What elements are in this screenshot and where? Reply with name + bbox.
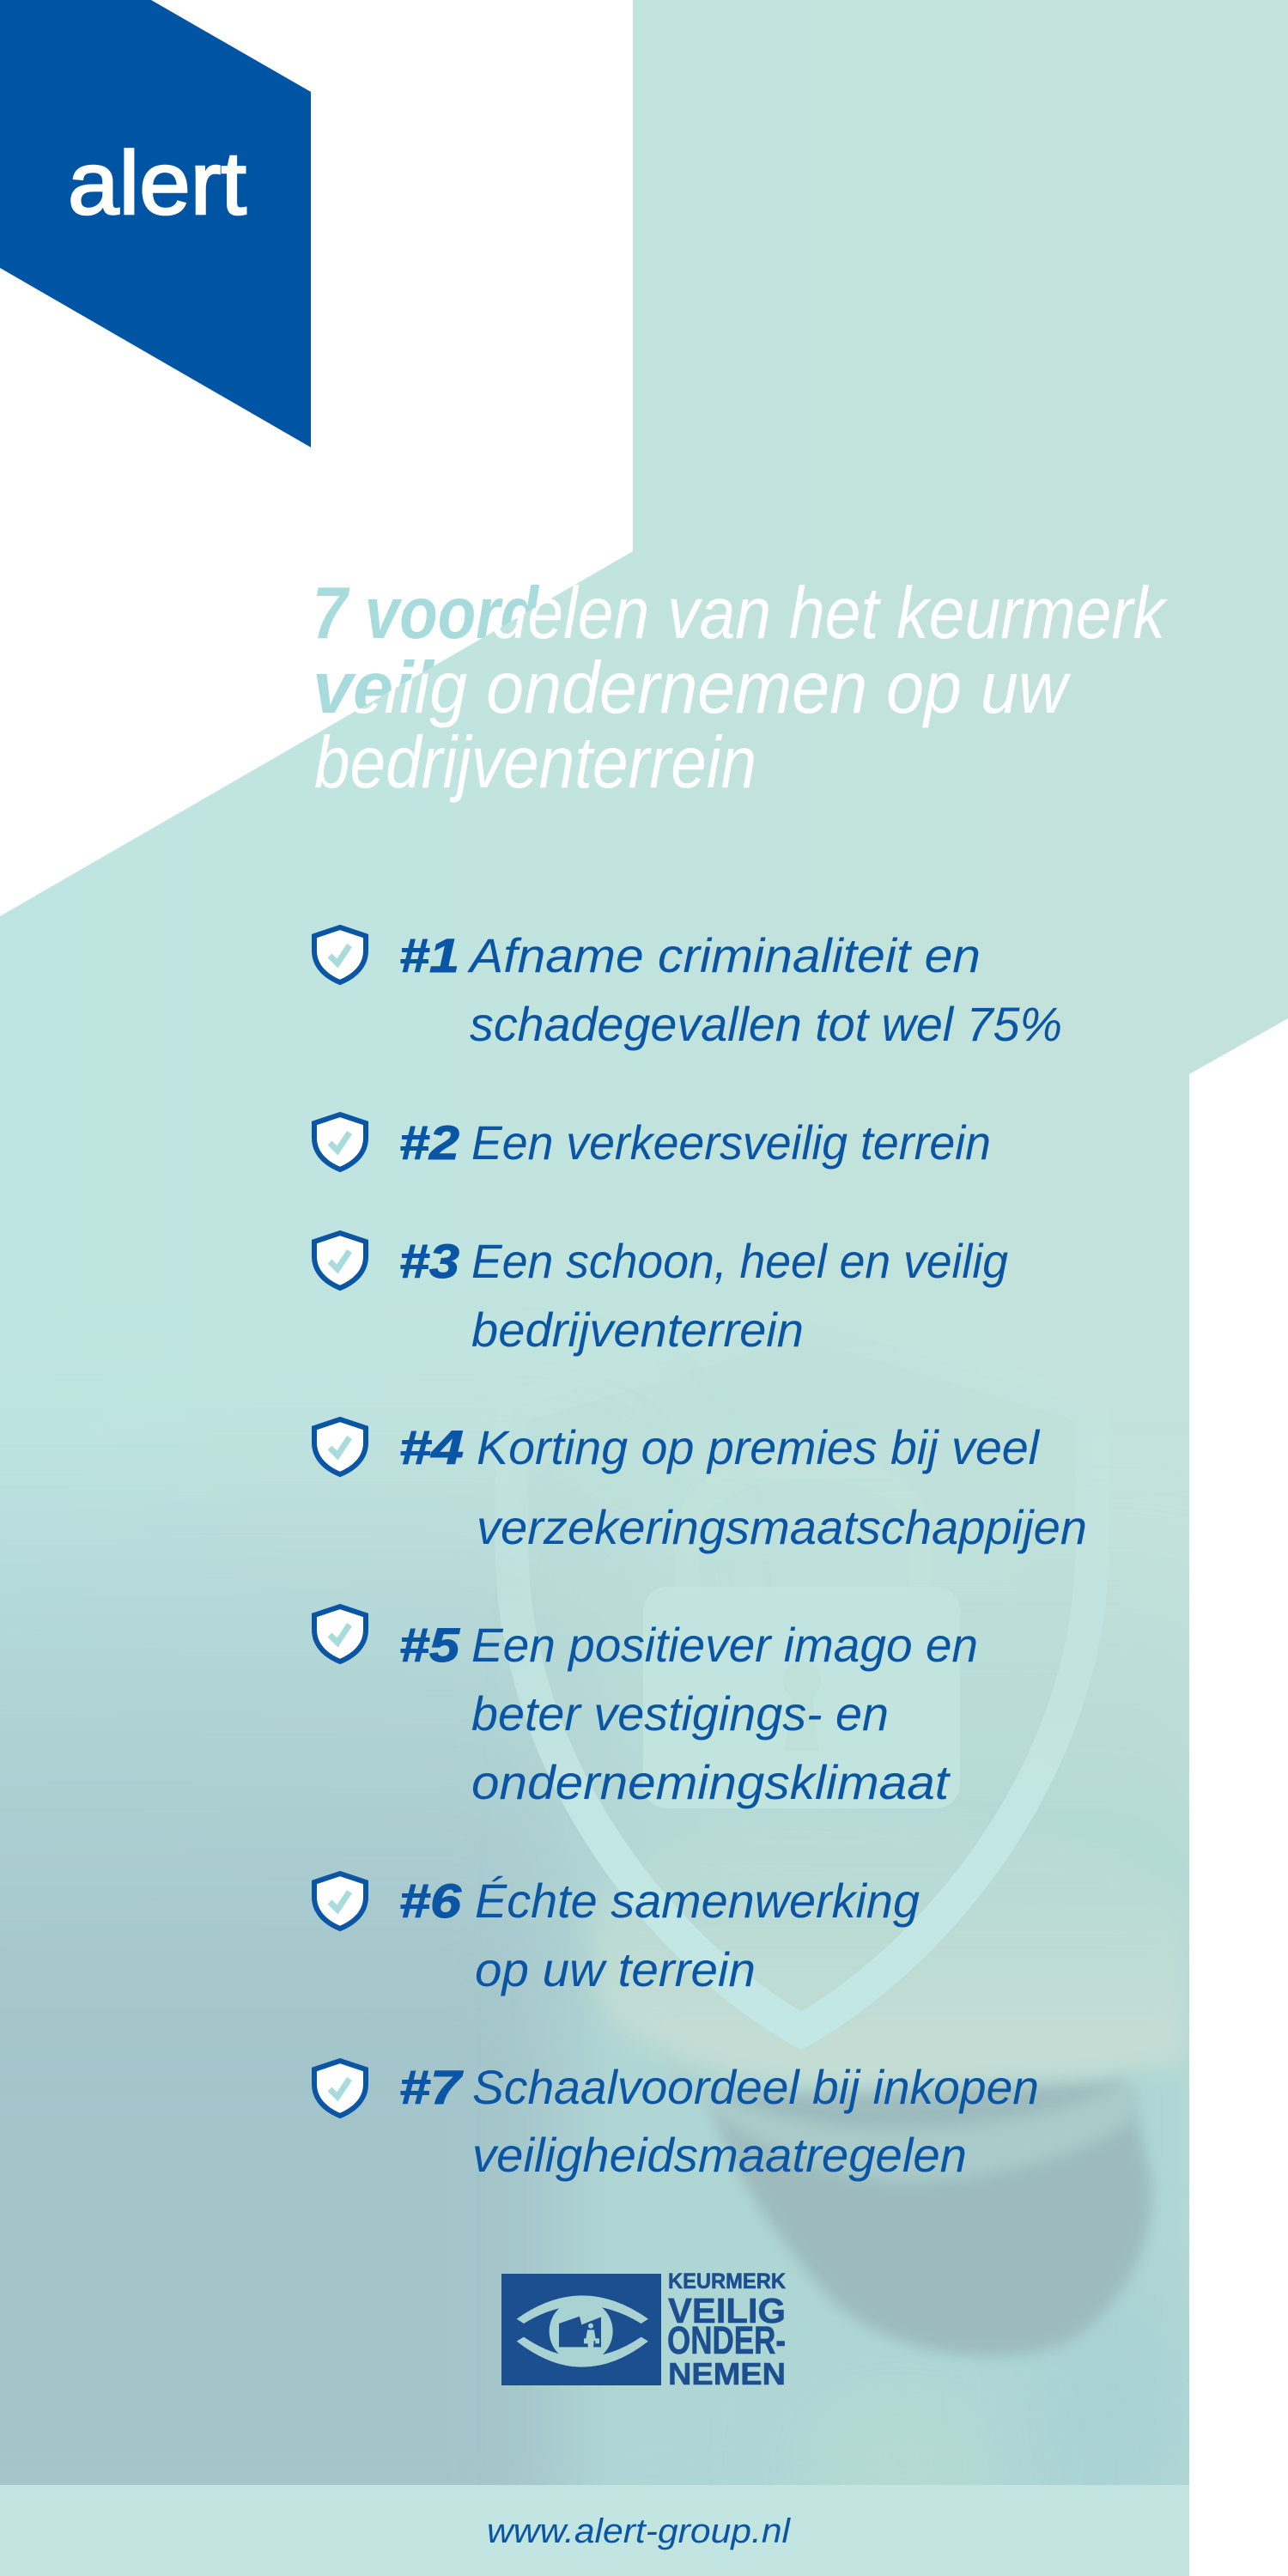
logo: keurmerk veilig ondernemen: ONDER-	[667, 2318, 786, 2362]
benefit 5	[314, 1607, 978, 1809]
title: veilig ondernemen op uw	[313, 647, 1071, 729]
logo: alert hexagon	[0, 0, 311, 447]
title: veil	[313, 647, 435, 729]
benefit 4: #4	[399, 1420, 464, 1474]
benefit 5: beter vestigings- en	[471, 1686, 889, 1741]
benefit 1	[314, 927, 1062, 1051]
benefit 5: Een positiever imago en	[471, 1618, 978, 1672]
benefit 6: Échte samenwerking	[475, 1874, 920, 1928]
benefit 6	[314, 1874, 920, 1996]
benefit 4: Korting op premies bij veel	[477, 1420, 1041, 1474]
benefit 5: ondernemingsklimaat	[471, 1755, 951, 1809]
logo: alert hexagon: alert	[68, 134, 246, 234]
benefit 3	[314, 1233, 1008, 1357]
website url: www.alert-group.nl	[487, 2512, 791, 2550]
benefit 4	[314, 1419, 1087, 1554]
benefit 2: Een verkeersveilig terrein	[471, 1115, 991, 1170]
logo: keurmerk veilig ondernemen: VEILIG	[668, 2291, 786, 2330]
benefit 6: op uw terrein	[475, 1942, 756, 1996]
benefit 5: #5	[399, 1618, 460, 1672]
benefit 1: #1	[399, 928, 459, 982]
benefit 4: verzekeringsmaatschappijen	[477, 1500, 1087, 1554]
logo: keurmerk veilig ondernemen	[501, 2269, 786, 2391]
title: bedrijventerrein	[314, 722, 756, 804]
benefit 2: #2	[399, 1115, 459, 1170]
benefit 1: Afname criminaliteit en	[467, 928, 981, 982]
logo: keurmerk veilig ondernemen: NEMEN	[668, 2356, 786, 2391]
title	[313, 573, 1169, 804]
benefit 7: veiligheidsmaatregelen	[472, 2128, 967, 2182]
title: 7 voord	[313, 573, 540, 654]
benefit 7: Schaalvoordeel bij inkopen	[472, 2060, 1039, 2114]
title: 7 voordelen van het keurmerk	[313, 573, 1169, 654]
benefit 3: bedrijventerrein	[471, 1303, 804, 1357]
benefit 6: #6	[399, 1874, 462, 1928]
benefit 1: schadegevallen tot wel 75%	[470, 997, 1062, 1051]
benefit 7: #7	[399, 2060, 464, 2114]
logo: keurmerk veilig ondernemen: KEURMERK	[668, 2269, 786, 2293]
benefit 3: Een schoon, heel en veilig	[471, 1234, 1008, 1288]
benefit 7	[314, 2060, 1039, 2182]
footer band	[0, 2485, 1189, 2576]
benefit 3: #3	[399, 1234, 459, 1288]
